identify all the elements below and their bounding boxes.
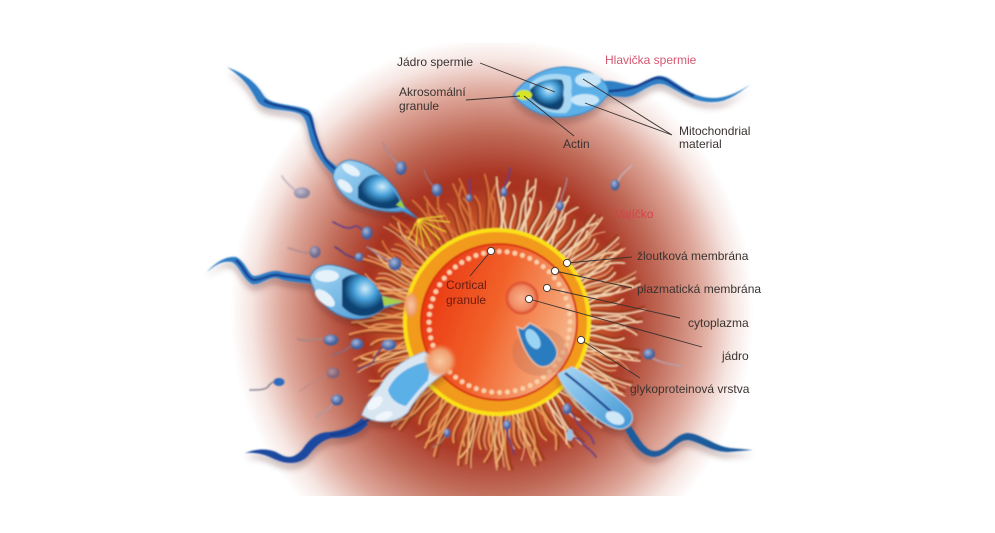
small sperm top centre <box>500 168 510 197</box>
background glow <box>200 43 790 496</box>
heading: Hlavička spermie: Hlavička spermie <box>605 53 697 67</box>
pale sperm left <box>282 176 310 198</box>
mitochondria <box>575 73 601 87</box>
label: Mitochondrial material: material <box>679 137 722 151</box>
label: cytoplazma: cytoplazma <box>688 316 749 330</box>
label: Cortical granule: Cortical <box>446 278 487 292</box>
far-left small sperm <box>250 378 284 390</box>
label: Actin: Actin <box>563 137 590 151</box>
sperm: middle left <box>207 257 404 319</box>
small sperm cells <box>250 143 682 457</box>
leader lines <box>466 63 702 378</box>
label: glykoproteinová vrstva: glykoproteinová vrstva <box>630 382 750 396</box>
sperm left a <box>335 247 364 262</box>
cytoplasm <box>421 244 577 400</box>
small sperm upper hair <box>466 179 472 202</box>
small sperm near hair <box>424 170 442 196</box>
egg-contact blob left <box>403 291 419 319</box>
small sperm bottom <box>433 428 450 447</box>
heading: Vajíčko: Vajíčko <box>615 207 654 221</box>
sperm: lower left <box>245 352 446 463</box>
small sperm lower left 2 <box>332 338 364 355</box>
sperm: lower right <box>558 367 753 457</box>
illustration: egg and sperm <box>207 67 753 515</box>
small sperm lower left 4 <box>317 394 343 417</box>
faded sperm <box>300 368 340 391</box>
small sperm bottom 2 <box>503 420 514 454</box>
label: Akrosomální granule: Akrosomální <box>399 85 466 99</box>
pale grey sperm <box>288 246 320 258</box>
head capsule <box>513 67 608 117</box>
sperm left b <box>367 247 402 270</box>
label: jádro: jádro <box>721 349 749 363</box>
label: Mitochondrial material: Mitochondrial <box>679 124 750 138</box>
small sperm lower right a <box>562 404 594 444</box>
egg body <box>403 228 591 416</box>
sperm: upper left <box>227 67 417 218</box>
purple-tailed sperm <box>333 222 372 240</box>
acrosomal filament burst <box>408 216 450 248</box>
egg hair layer: glycoprotein filaments <box>314 158 672 515</box>
small sperm lower right b <box>566 429 596 457</box>
small sperm top centre 2 <box>556 178 567 211</box>
label: plazmatická membrána: plazmatická membrána <box>637 282 761 296</box>
nucleus <box>530 74 572 113</box>
egg-contact blob lower left <box>423 344 457 378</box>
yellow membrane ring <box>403 228 591 416</box>
tail <box>604 76 751 102</box>
sperm: top right (labelled head) <box>513 67 751 117</box>
label: Jádro spermie: Jádro spermie <box>397 55 473 69</box>
orange zona <box>407 232 587 412</box>
small sperm top right <box>610 165 632 190</box>
nucleus <box>506 282 538 314</box>
small sperm right <box>643 348 682 366</box>
acrosomal granule <box>516 90 532 100</box>
cortical granules <box>429 252 570 392</box>
label markers <box>487 247 585 344</box>
label: Akrosomální granule: granule <box>399 99 439 113</box>
small sperm top left <box>383 143 406 175</box>
label: Cortical granule: granule <box>446 293 486 307</box>
label: žloutková membrána: žloutková membrána <box>637 249 749 263</box>
small sperm lower left 1 <box>298 334 338 346</box>
small sperm lower left 3 <box>358 340 396 370</box>
sperm head inside egg <box>512 323 568 376</box>
